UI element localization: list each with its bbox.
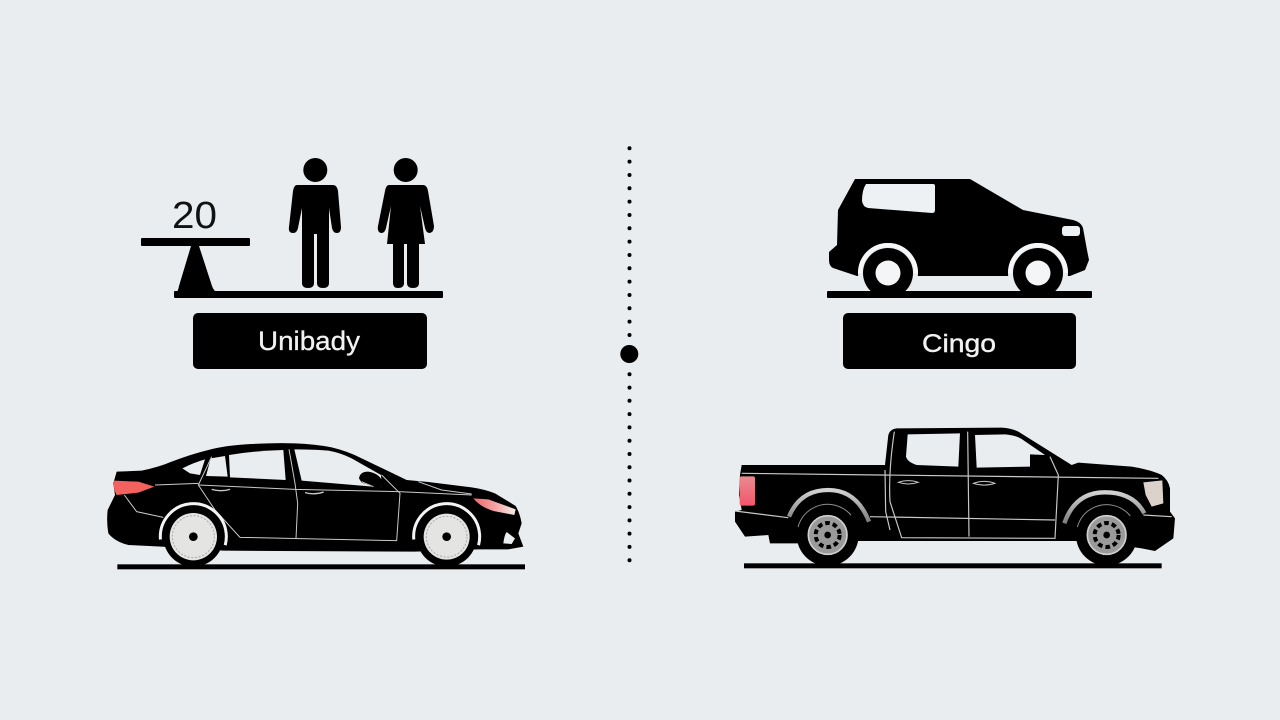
- sedan tail light: [114, 481, 154, 495]
- sedan body: [107, 443, 523, 552]
- sedan mirror: [359, 472, 382, 489]
- icon: woman: [378, 158, 434, 288]
- panel: unibody load and occupants: [141, 158, 443, 369]
- sedan ground line: [117, 564, 525, 569]
- icon: balance scale: [141, 238, 250, 292]
- sedan fog vent: [503, 532, 515, 544]
- number: 20: 20: [172, 195, 217, 237]
- truck ground line: [744, 563, 1162, 568]
- label: Cingo: Cingo: [922, 330, 996, 358]
- divider: dotted line with centre dot: [620, 146, 638, 562]
- truck windows: [906, 433, 1045, 468]
- ground line: [174, 291, 443, 298]
- sedan windows: [182, 449, 382, 487]
- icon: SUV silhouette: [829, 179, 1089, 303]
- sedan door lines: [124, 449, 472, 541]
- sedan headlight: [473, 498, 516, 515]
- illustration: black sedan: [107, 443, 525, 572]
- truck wheel flares: [789, 490, 1144, 523]
- panel: cargo vehicle icon: [827, 179, 1092, 369]
- truck wheels: [790, 497, 1144, 573]
- truck door lines: [735, 432, 1172, 538]
- truck tail light: [740, 476, 755, 506]
- label: Unibady: [193, 313, 427, 369]
- ground line: [827, 291, 1092, 298]
- sedan wheel arches and wheels: [158, 501, 482, 572]
- truck body: [735, 428, 1175, 551]
- label: Cingo: [843, 313, 1076, 369]
- truck headlight: [1143, 480, 1163, 507]
- illustration: black pickup truck: [735, 428, 1175, 573]
- label: Unibady: Unibady: [258, 326, 361, 356]
- icon: man: [289, 158, 341, 288]
